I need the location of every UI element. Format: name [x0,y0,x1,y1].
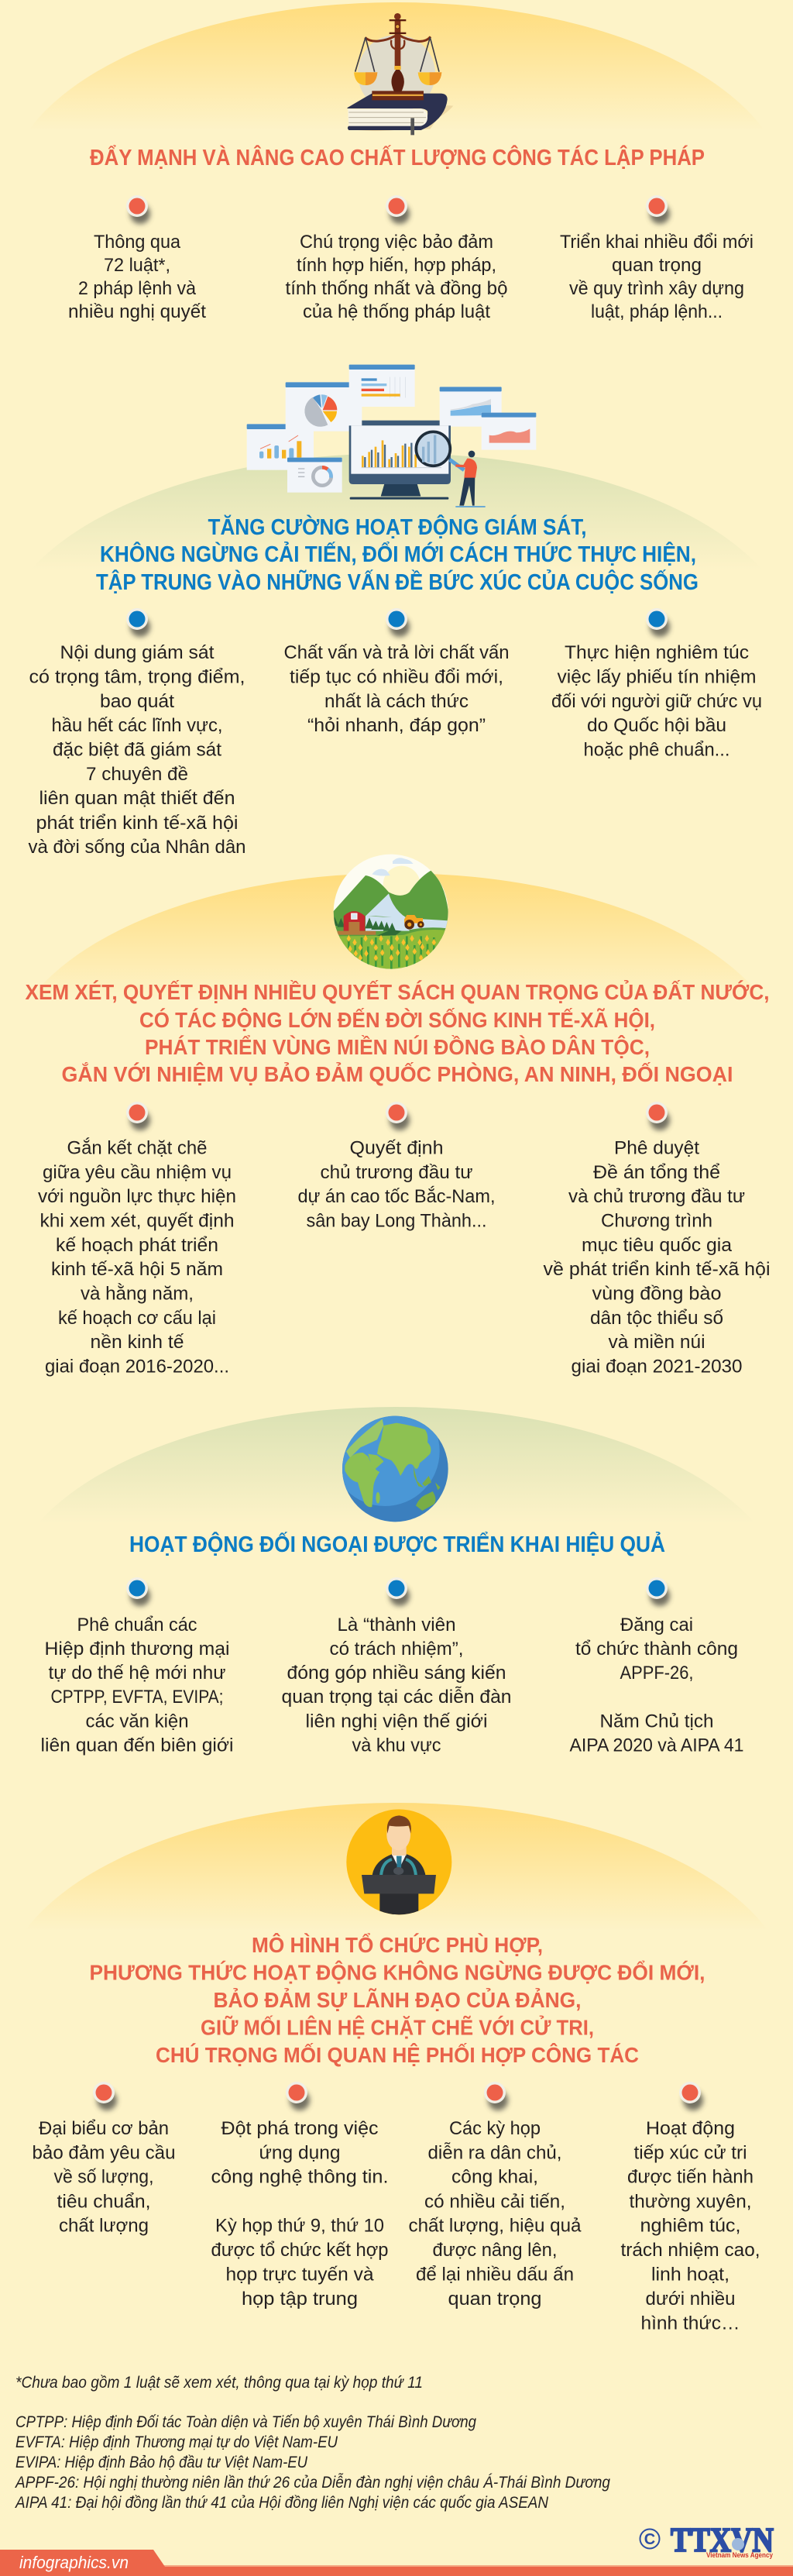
text block: có nhiều cải tiến, [424,2191,565,2213]
bullet [126,1102,150,1130]
text block: Hiệp định thương mại [45,1639,229,1659]
text block: tổ chức thành công [575,1639,738,1659]
logo: TTXVN [640,2521,774,2559]
text block [211,2118,389,2309]
text block: hình thức… [641,2313,740,2334]
text block: Chú trọng việc bảo đảm [300,232,493,253]
text block: bảo đảm yêu cầu [33,2143,175,2163]
heading: TĂNG CƯỜNG HOẠT ĐỘNG GIÁM SÁT, [208,514,587,540]
text block: về số lượng, [54,2166,153,2188]
text block [285,232,508,322]
footer band: infographics.vn [19,2553,129,2572]
panel: lawmaking section [5,2,788,390]
icon: globe [342,1416,448,1522]
text block: liên nghị viện thế giới [305,1711,488,1732]
column 1 [68,195,206,322]
text block: kế hoạch phát triển [56,1235,218,1256]
heading: KHÔNG NGỪNG CẢI TIẾN, ĐỔI MỚI CÁCH THỨC THỰC HIỆN, [100,541,696,567]
heading [90,1932,705,2067]
column 4 [621,2082,760,2334]
text block: giữa yêu cầu nhiệm vụ [43,1162,232,1183]
text block: của hệ thống pháp luật [303,301,490,322]
text block: tính hợp hiến, hợp pháp, [297,255,496,276]
text block: tính thống nhất và đồng bộ [285,278,508,299]
icon: farm landscape in a circle [332,855,451,972]
text block [560,232,754,322]
text block: tự do thế hệ mới như [48,1663,226,1684]
text block: luật, pháp lệnh... [591,301,723,322]
text block: Phê chuẩn các [77,1615,197,1635]
column 1 [33,2082,175,2236]
heading: MÔ HÌNH TỔ CHỨC PHÙ HỢP, [252,1932,543,1957]
text block [40,1615,234,1756]
text block: Chương trình [601,1210,712,1232]
column 3 [409,2082,582,2309]
column 2 [283,608,510,736]
text block: có trọng tâm, trọng điểm, [29,666,245,688]
text block [33,2118,175,2236]
text block: trách nhiệm cao, [621,2240,760,2261]
bullet [386,195,410,224]
bullet [286,2082,310,2110]
heading [25,979,770,1086]
text block: hoặc phê chuẩn... [584,739,729,761]
icon: dashboards, monitor and analyst [247,365,536,507]
column 3 [570,1577,743,1756]
text block: quan trọng [448,2289,542,2309]
text block: nhiều nghị quyết [68,301,206,322]
heading: PHƯƠNG THỨC HOẠT ĐỘNG KHÔNG NGỪNG ĐƯỢC ĐỔI MỚI, [90,1960,705,1985]
column 2 [297,1102,496,1232]
heading: CÓ TÁC ĐỘNG LỚN ĐẾN ĐỜI SỐNG KINH TẾ-XÃ HỘI, [139,1007,655,1032]
logo: TTXVN: C [644,2531,655,2548]
text block: nhất là cách thức [324,691,469,712]
text block: Các kỳ họp [449,2118,541,2139]
bullet [93,2082,117,2110]
text block: phát triển kinh tế-xã hội [36,813,239,834]
text block: công nghệ thông tin. [211,2166,389,2188]
bullet [386,608,410,637]
text block [409,2118,582,2309]
logo: TTXVN: Vietnam News Agency [706,2551,773,2559]
text block: được tiến hành [627,2166,754,2188]
text block: 2 pháp lệnh và [78,278,197,299]
bullet [126,195,150,224]
footnotes: EVFTA: Hiệp định Thương mại tự do Việt Nam-EU [15,2433,338,2451]
column 1 [40,1577,234,1756]
panel: supervision section [0,365,793,858]
text block: đối với người giữ chức vụ [551,691,762,712]
text block: được nâng lên, [432,2240,558,2261]
footnotes [14,2374,610,2512]
text block: Đề án tổng thể [593,1162,720,1183]
footnotes: EVIPA: Hiệp định Bảo hộ đầu tư Việt Nam-EU [15,2454,308,2471]
text block [297,1137,496,1232]
text block: tiếp tục có nhiều đổi mới, [290,666,503,688]
text block: và chủ trương đầu tư [568,1186,745,1207]
text block [68,232,206,322]
text block [282,1615,511,1756]
text block: ứng dụng [259,2143,341,2163]
text block [544,1137,770,1377]
text block: giai đoạn 2016-2020... [45,1356,229,1377]
column 1 [28,608,246,858]
text block: kế hoạch cơ cấu lại [58,1308,216,1329]
text block: Đại biểu cơ bản [39,2118,169,2139]
column 3 [544,1102,770,1377]
bullet [126,608,150,637]
text block [283,642,510,736]
text block: nền kinh tế [90,1332,184,1353]
bullet [646,195,670,224]
text block: APPF-26, [620,1663,694,1684]
text block: và đời sống của Nhân dân [28,837,246,858]
text block: Nội dung giám sát [60,642,215,663]
logo: TTXVN: TTXVN [671,2521,774,2559]
text block: Là “thành viên [338,1615,455,1635]
panel: key decisions section [5,855,788,1377]
footer band [0,2550,793,2576]
text block: CPTPP, EVFTA, EVIPA; [51,1687,223,1708]
footnotes: AIPA 41: Đại hội đồng lần thứ 41 của Hội đồng liên Nghị viện các quốc gia ASEAN [14,2494,549,2512]
footnotes: *Chưa bao gồm 1 luật sẽ xem xét, thông qua tại kỳ họp thứ 11 [15,2374,423,2392]
heading: BẢO ĐẢM SỰ LÃNH ĐẠO CỦA ĐẢNG, [214,1987,581,2012]
icon: scales of justice on a book [347,13,453,135]
text block: nghiêm túc, [640,2216,740,2236]
text block: tiếp xúc cử tri [633,2143,747,2163]
heading: TẬP TRUNG VÀO NHỮNG VẤN ĐỀ BỨC XÚC CỦA CUỘC SỐNG [96,569,699,595]
text block: bao quát [100,691,174,712]
text block: “hỏi nhanh, đáp gọn” [307,715,486,736]
heading: GIỮ MỐI LIÊN HỆ CHẶT CHẼ VỚI CỬ TRI, [201,2014,594,2039]
text block: Đột phá trong việc [221,2118,378,2139]
text block: được tổ chức kết hợp [211,2240,389,2261]
text block: diễn ra dân chủ, [427,2143,562,2163]
text block: quan trọng tại các diễn đàn [282,1687,511,1708]
text block: giai đoạn 2021-2030 [572,1356,742,1377]
text block: để lại nhiều dấu ấn [416,2264,574,2285]
text block: họp trực tuyến và [226,2264,374,2285]
heading: ĐẨY MẠNH VÀ NÂNG CAO CHẤT LƯỢNG CÔNG TÁC LẬP PHÁP [90,144,705,170]
text block: việc lấy phiếu tín nhiệm [558,666,756,688]
text block: các văn kiện [85,1711,189,1732]
text block: liên quan mật thiết đến [39,788,235,809]
column 2 [211,2082,389,2309]
column 1 [38,1102,236,1377]
text block: linh hoạt, [651,2264,729,2285]
bullet [646,1577,670,1606]
text block: Hoạt động [646,2118,735,2139]
heading [96,514,699,595]
text block: dự án cao tốc Bắc-Nam, [297,1186,496,1207]
text block: đặc biệt đã giám sát [53,739,221,761]
text block: với nguồn lực thực hiện [38,1186,236,1207]
text block [621,2118,760,2334]
text block: mục tiêu quốc gia [582,1235,733,1256]
text block: Thực hiện nghiêm túc [565,642,749,663]
text block: liên quan đến biên giới [40,1735,234,1756]
footnotes: CPTPP: Hiệp định Đối tác Toàn diện và Tiến bộ xuyên Thái Bình Dương [15,2413,476,2431]
text block: và khu vực [352,1735,441,1756]
text block: 72 luật*, [104,255,170,276]
text block [28,642,246,858]
text block: sân bay Long Thành... [307,1210,486,1232]
text block: tiêu chuẩn, [57,2191,150,2213]
text block: kinh tế-xã hội 5 năm [51,1259,223,1280]
text block: thường xuyên, [629,2191,751,2213]
panel: foreign affairs section [42,1407,743,1756]
text block: dưới nhiều [646,2289,736,2309]
text block: họp tập trung [242,2289,358,2309]
icon: speaker at lectern [346,1809,451,1916]
bullet [679,2082,703,2110]
heading: PHÁT TRIỂN VÙNG MIỀN NÚI ĐỒNG BÀO DÂN TỘC, [145,1034,650,1059]
bullet [646,608,670,637]
footnotes: APPF-26: Hội nghị thường niên lần thứ 26 của Diễn đàn nghị viện châu Á-Thái Bình Dương [14,2474,610,2492]
text block: có trách nhiệm”, [330,1639,463,1659]
text block: dân tộc thiểu số [590,1308,723,1329]
text block: công khai, [451,2166,538,2188]
heading: GẮN VỚI NHIỆM VỤ BẢO ĐẢM QUỐC PHÒNG, AN NINH, ĐỐI NGOẠI [62,1061,733,1086]
panel: organisation section [2,1803,791,2334]
text block: Năm Chủ tịch [599,1711,714,1732]
text block: Phê duyệt [614,1137,699,1159]
column 3 [551,608,762,761]
text block: Đăng cai [620,1615,693,1635]
heading: CHÚ TRỌNG MỐI QUAN HỆ PHỐI HỢP CÔNG TÁC [156,2042,639,2067]
text block: Triển khai nhiều đổi mới [560,232,754,253]
text block: Thông qua [94,232,181,253]
text block: về phát triển kinh tế-xã hội [544,1259,770,1280]
bullet [126,1577,150,1606]
text block: Gắn kết chặt chẽ [67,1137,208,1159]
text block: Quyết định [350,1137,443,1159]
text block: 7 chuyên đề [86,764,188,785]
column 2 [285,195,508,322]
text block [38,1137,236,1377]
text block: khi xem xét, quyết định [40,1210,234,1232]
bullet [386,1102,410,1130]
text block: do Quốc hội bầu [587,715,726,736]
text block: và miền núi [609,1332,705,1353]
text block: vùng đồng bào [592,1283,722,1305]
bullet [484,2082,508,2110]
text block: Chất vấn và trả lời chất vấn [283,642,510,663]
text block: hầu hết các lĩnh vực, [51,715,223,736]
text block: quan trọng [612,255,702,276]
text block: Kỳ họp thứ 9, thứ 10 [215,2216,384,2236]
column 2 [282,1577,511,1756]
text block: chủ trương đầu tư [321,1162,472,1183]
text block [551,642,762,761]
column 3 [560,195,754,322]
bullet [646,1102,670,1130]
text block: chất lượng [59,2216,149,2236]
text block [570,1615,743,1756]
bullet [386,1577,410,1606]
text block: AIPA 2020 và AIPA 41 [570,1735,743,1756]
text block: chất lượng, hiệu quả [409,2216,582,2236]
text block: đóng góp nhiều sáng kiến [287,1663,506,1684]
text block: về quy trình xây dựng [569,278,744,299]
heading: HOẠT ĐỘNG ĐỐI NGOẠI ĐƯỢC TRIỂN KHAI HIỆU QUẢ [129,1531,665,1557]
text block: và hằng năm, [81,1283,194,1305]
